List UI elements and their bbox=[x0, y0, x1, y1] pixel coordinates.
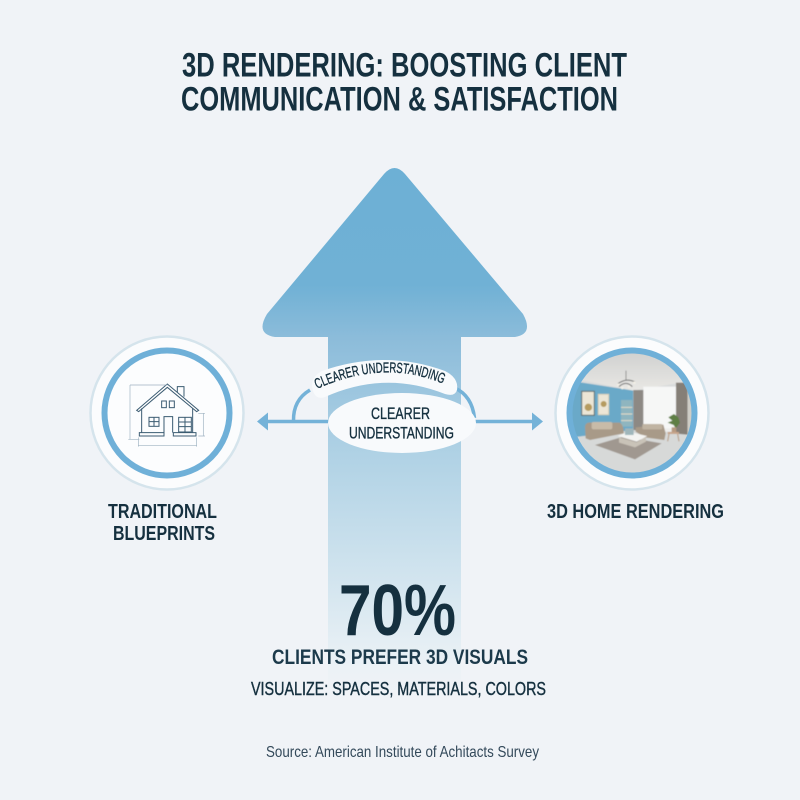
statistic: 70%: 70% bbox=[339, 571, 456, 651]
icon: house blueprint bbox=[128, 384, 205, 447]
stat detail: VISUALIZE: SPACES, MATERIALS, COLORS bbox=[251, 678, 546, 699]
label: traditional blueprints bbox=[108, 500, 217, 545]
banner text: CLEARER UNDERSTANDING bbox=[314, 362, 446, 388]
icon: blueprint house badge bbox=[90, 336, 244, 490]
right arrow bbox=[475, 412, 543, 430]
icon: 3D room rendering badge bbox=[556, 336, 708, 490]
label: traditional blueprints: BLUEPRINTS bbox=[113, 522, 215, 545]
room interior bbox=[572, 354, 692, 472]
label: 3D home rendering: 3D HOME RENDERING bbox=[547, 500, 724, 523]
label: traditional blueprints: TRADITIONAL bbox=[108, 500, 217, 523]
left connector arc bbox=[293, 390, 310, 421]
center ellipse callout: CLEARER bbox=[371, 405, 430, 423]
title: COMMUNICATION & SATISFACTION bbox=[181, 80, 618, 118]
stat caption: CLIENTS PREFER 3D VISUALS bbox=[272, 645, 528, 669]
title: 3D RENDERING: BOOSTING CLIENT bbox=[182, 46, 627, 84]
left arrow bbox=[257, 412, 329, 430]
center ellipse callout: UNDERSTANDING bbox=[349, 424, 454, 442]
source note: Source: American Institute of Achitacts Survey bbox=[266, 744, 539, 761]
curved banner bbox=[314, 360, 458, 396]
big upward arrow bbox=[262, 168, 527, 690]
center ellipse callout bbox=[328, 393, 476, 453]
right connector arc bbox=[455, 388, 474, 418]
title bbox=[181, 46, 627, 118]
